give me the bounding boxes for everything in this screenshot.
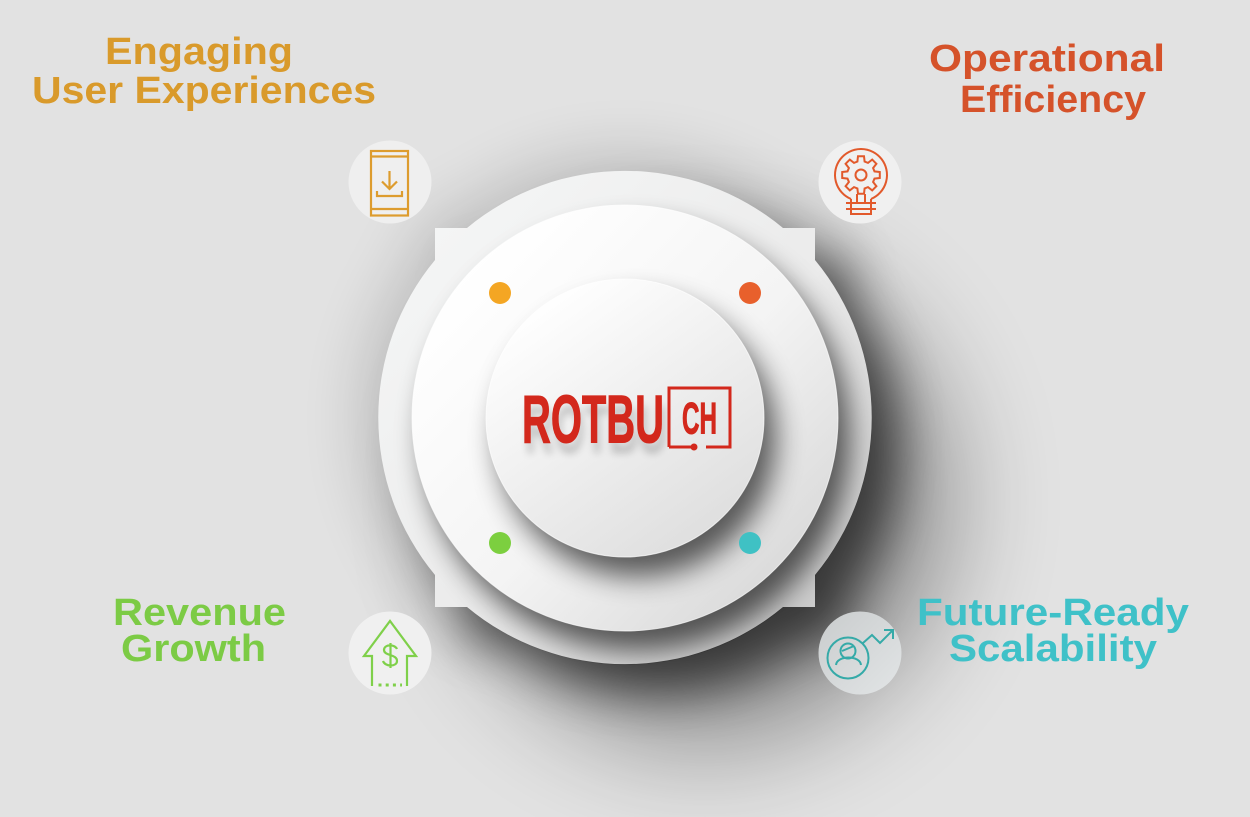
inner disc bbox=[486, 279, 764, 557]
logo bracket bbox=[669, 388, 730, 447]
heading: future-ready scalability bbox=[917, 592, 1189, 670]
heading: engaging user experiences: User Experiences bbox=[32, 70, 376, 112]
dot: teal bbox=[739, 532, 761, 554]
cast shadow bbox=[360, 153, 950, 745]
logo bbox=[522, 382, 730, 468]
heading: operational efficiency: Operational bbox=[929, 38, 1165, 80]
middle disc bbox=[412, 205, 838, 631]
logo shadow: ROTBU bbox=[525, 392, 667, 468]
heading: engaging user experiences: Engaging bbox=[105, 31, 293, 73]
heading: future-ready scalability: Future-Ready bbox=[917, 592, 1189, 634]
icon: gear light bulb bbox=[818, 140, 902, 224]
heading: revenue growth: Revenue bbox=[113, 592, 286, 634]
heading: future-ready scalability: Scalability bbox=[949, 628, 1157, 670]
icon: person growth bbox=[818, 612, 902, 694]
dot: green bbox=[489, 532, 511, 554]
dot: red-orange bbox=[739, 282, 761, 304]
logo wordmark: ROTBU bbox=[522, 382, 664, 458]
icon: dollar house arrow bbox=[348, 612, 432, 694]
concentric dial bbox=[378, 171, 872, 664]
heading: operational efficiency bbox=[929, 38, 1165, 121]
heading: operational efficiency: Efficiency bbox=[960, 79, 1146, 121]
logo CH: CH bbox=[682, 394, 717, 444]
icon: phone download bbox=[348, 140, 432, 224]
heading: engaging user experiences bbox=[32, 31, 376, 112]
outer disc with square corners bbox=[378, 171, 872, 664]
dot: orange bbox=[489, 282, 511, 304]
heading: revenue growth bbox=[113, 592, 286, 670]
heading: revenue growth: Growth bbox=[121, 628, 266, 670]
